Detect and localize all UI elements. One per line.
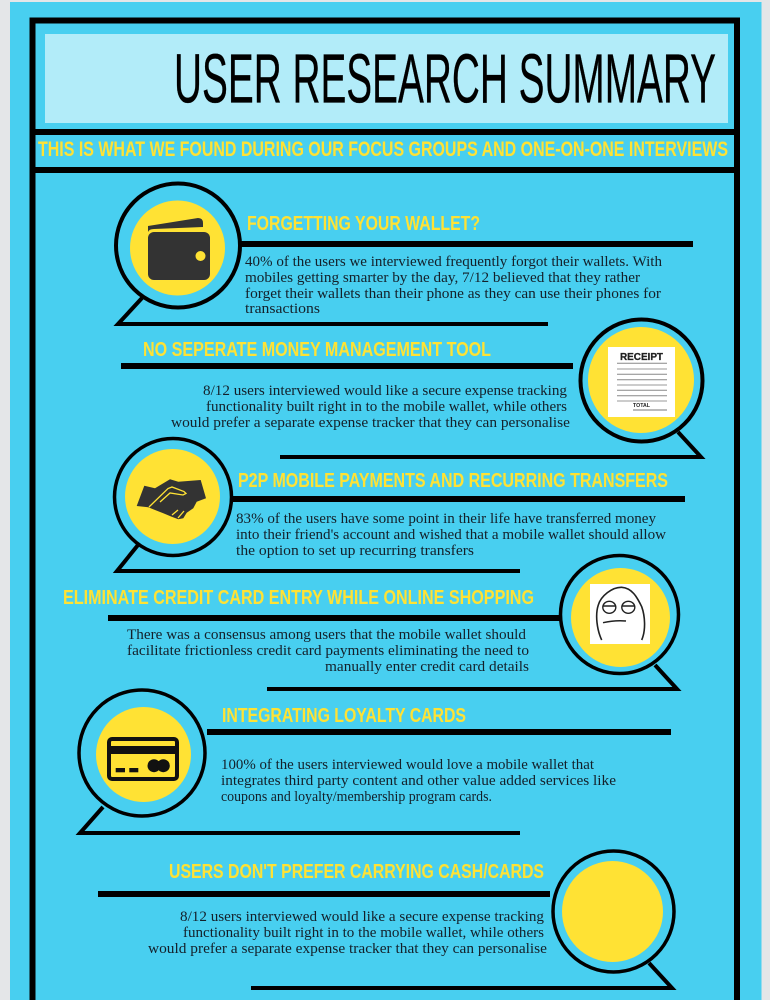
body text: There was a consensus among users that the mobile wallet should bbox=[127, 627, 527, 643]
bubble ring bbox=[116, 184, 240, 308]
body text bbox=[148, 909, 547, 957]
icon: meme face bbox=[571, 568, 670, 667]
panel: users don't prefer carrying cash bbox=[98, 851, 674, 988]
speech bubble bbox=[118, 298, 548, 324]
bubble ring bbox=[560, 556, 678, 674]
icon: empty yellow disc bbox=[562, 861, 663, 962]
body text: 83% of the users have some point in their life have transferred money bbox=[236, 511, 657, 527]
body text: 8/12 users interviewed would like a secure expense tracking bbox=[203, 383, 567, 399]
body text: would prefer a separate expense tracker that they can personalise bbox=[171, 415, 570, 431]
body text: into their friend's account and wished that a mobile wallet should allow bbox=[236, 527, 667, 543]
heading: NO SEPERATE MONEY MANAGEMENT TOOL bbox=[143, 338, 491, 361]
body text: manually enter credit card details bbox=[325, 659, 529, 675]
panel: no separate money management tool bbox=[121, 320, 702, 457]
speech bubble bbox=[251, 963, 672, 988]
panel: eliminate credit card entry bbox=[63, 556, 678, 689]
body text: functionality built right in to the mobile wallet, while others bbox=[183, 925, 544, 941]
speech bubble bbox=[280, 432, 701, 457]
icon: receipt bbox=[588, 327, 694, 433]
panel: integrating loyalty cards bbox=[79, 690, 671, 833]
body text: transactions bbox=[245, 301, 320, 317]
body text bbox=[127, 627, 529, 675]
icon: credit card bbox=[96, 707, 191, 802]
body text: mobiles getting smarter by the day, 7/12 believed that they rather bbox=[245, 270, 640, 286]
heading: FORGETTING YOUR WALLET? bbox=[247, 212, 480, 235]
divider bars bbox=[35, 132, 734, 170]
body text: 40% of the users we interviewed frequently forgot their wallets. With bbox=[245, 254, 663, 270]
body text: would prefer a separate expense tracker that they can personalise bbox=[148, 941, 547, 957]
body text bbox=[236, 511, 667, 559]
body text bbox=[221, 757, 616, 805]
icon: receipt: TOTAL bbox=[633, 403, 650, 409]
body text: 100% of the users interviewed would love a mobile wallet that bbox=[221, 757, 594, 773]
bubble ring bbox=[553, 851, 674, 972]
speech bubble bbox=[80, 807, 520, 833]
heading: USERS DON'T PREFER CARRYING CASH/CARDS bbox=[169, 860, 544, 883]
speech bubble bbox=[117, 545, 520, 571]
heading bar bbox=[98, 891, 550, 897]
bubble ring bbox=[114, 438, 232, 556]
heading: INTEGRATING LOYALTY CARDS bbox=[222, 704, 466, 727]
icon: wallet bbox=[130, 200, 225, 296]
heading bar bbox=[207, 729, 671, 735]
heading: ELIMINATE CREDIT CARD ENTRY WHILE ONLINE SHOPPING bbox=[63, 586, 534, 609]
heading bar bbox=[108, 615, 560, 621]
heading bar bbox=[121, 363, 573, 369]
panel: forgetting your wallet bbox=[116, 184, 693, 324]
bubble ring bbox=[580, 320, 702, 442]
panel: p2p mobile payments bbox=[114, 438, 685, 571]
body text bbox=[245, 254, 663, 317]
body text: integrates third party content and other value added services like bbox=[221, 773, 616, 789]
title banner bbox=[45, 34, 728, 123]
icon: receipt: RECEIPT bbox=[620, 351, 664, 363]
heading bar bbox=[232, 496, 685, 502]
body text: functionality built right in to the mobile wallet, while others bbox=[206, 399, 567, 415]
heading bar bbox=[240, 241, 693, 247]
body text: coupons and loyalty/membership program cards. bbox=[221, 789, 492, 805]
body text: the option to set up recurring transfers bbox=[236, 543, 474, 559]
body text: forget their wallets than their phone as they can use their phones for bbox=[245, 286, 661, 302]
body text bbox=[171, 383, 570, 431]
icon: handshake bbox=[125, 449, 220, 544]
body text: 8/12 users interviewed would like a secure expense tracking bbox=[180, 909, 544, 925]
body text: facilitate frictionless credit card payments eliminating the need to bbox=[127, 643, 529, 659]
speech bubble bbox=[267, 665, 677, 689]
bubble ring bbox=[79, 690, 205, 816]
